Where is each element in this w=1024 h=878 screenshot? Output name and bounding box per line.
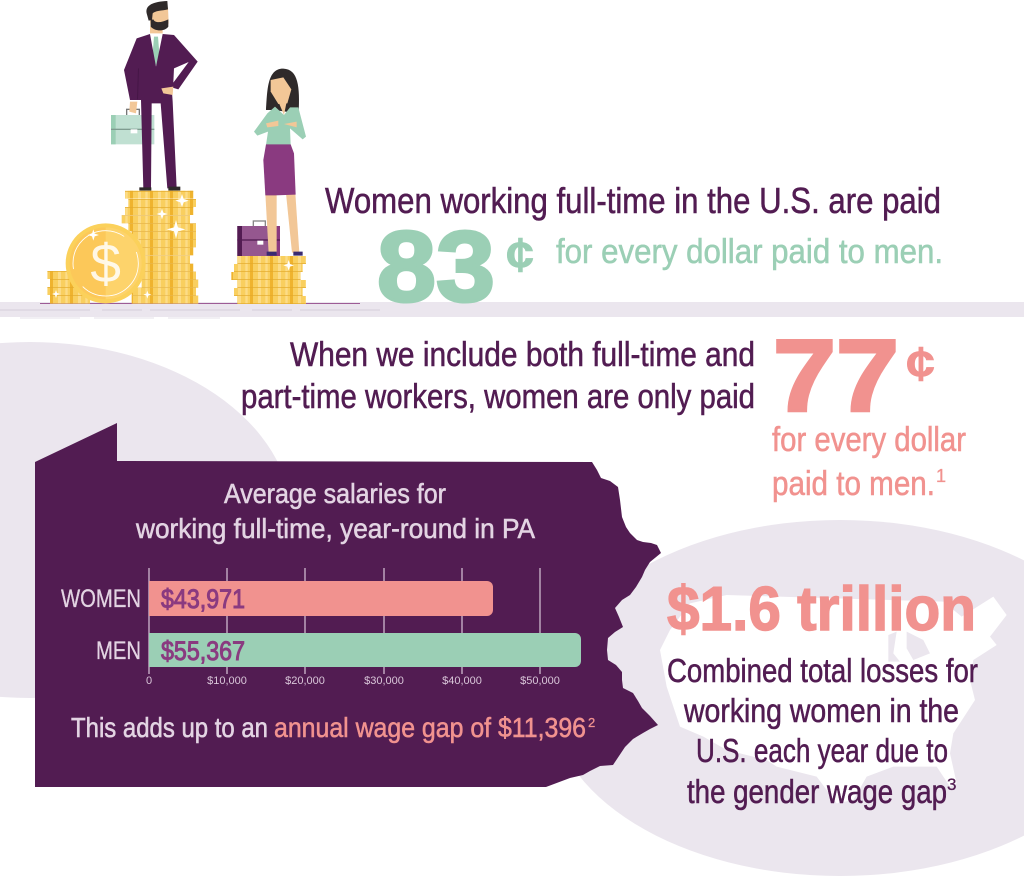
axis labels: $40,000: [442, 675, 482, 687]
title line one: Average salaries for: [224, 478, 446, 509]
footnote marker 3: 3: [947, 775, 956, 794]
text: line three: U.S. each year due to: [696, 732, 948, 769]
axis labels: $20,000: [285, 675, 325, 687]
map: United States: [660, 595, 1007, 803]
stat: 83 cents: 83: [377, 211, 495, 323]
coin sparkles: [52, 194, 294, 299]
footnote marker 2: 2: [588, 715, 595, 730]
axis labels: [146, 675, 560, 687]
text: for every dollar: for every dollar paid to men.: [556, 233, 943, 271]
text: line one: When we include both full-time and: [290, 336, 755, 374]
axis labels: $50,000: [520, 675, 560, 687]
footnote marker 1: 1: [936, 466, 946, 486]
background circle: left: [0, 342, 292, 698]
stat: 1.6 trillion: $1.6 trillion: [667, 575, 976, 644]
value: men: $55,367: [161, 636, 245, 666]
cent sign: 77: ¢: [906, 338, 935, 391]
stat: 77 cents: 77: [773, 319, 899, 433]
axis labels: $10,000: [207, 675, 247, 687]
axis labels: 0: [146, 675, 152, 687]
bar chart: average salaries: [61, 568, 581, 687]
headline: full-time workers: [325, 180, 943, 323]
icon: woman's briefcase: [237, 221, 280, 256]
background circle: right: [550, 520, 1024, 876]
label: women: WOMEN: [61, 585, 141, 613]
callout: national losses: [667, 575, 978, 810]
medium coin stack: [231, 256, 306, 304]
woman figure: [254, 69, 306, 256]
text: line two: working women in the: [683, 692, 959, 729]
callout: full-time and part-time workers: [241, 319, 966, 503]
text: lead-in: This adds up to an: [71, 712, 268, 743]
title line two: working full-time, year-round in PA: [135, 513, 535, 544]
Pennsylvania silhouette: [35, 423, 661, 787]
illustration: man and woman on coin stacks: [47, 1, 306, 304]
icon: dollar coin: $: [90, 233, 121, 295]
small left coin stack: [47, 271, 90, 304]
chart title: [135, 478, 535, 544]
cent sign: 83: ¢: [506, 229, 534, 282]
bar: men: [149, 633, 581, 667]
label: men: MEN: [96, 637, 141, 665]
text: paid to men: paid to men.: [772, 465, 935, 503]
man figure: [124, 1, 198, 191]
ground band: [0, 302, 1024, 318]
bar: women: [149, 581, 493, 616]
axis labels: $30,000: [364, 675, 404, 687]
icon: dollar coin: [66, 223, 146, 303]
text: line two: part-time workers, women are only paid: [241, 378, 755, 416]
text: highlighted gap: annual wage gap of $11,396: [274, 712, 586, 743]
map panel: Pennsylvania: [35, 423, 661, 787]
text: women working full-time: Women working full-time in the U.S. are paid: [325, 180, 941, 221]
text: annual wage gap: [71, 712, 595, 743]
big coin stack: [122, 191, 198, 304]
value: women: $43,971: [161, 584, 245, 614]
text: for every dollar: for every dollar: [772, 421, 966, 459]
icon: man's briefcase: [111, 109, 154, 144]
text: line four: the gender wage gap: [687, 773, 947, 810]
